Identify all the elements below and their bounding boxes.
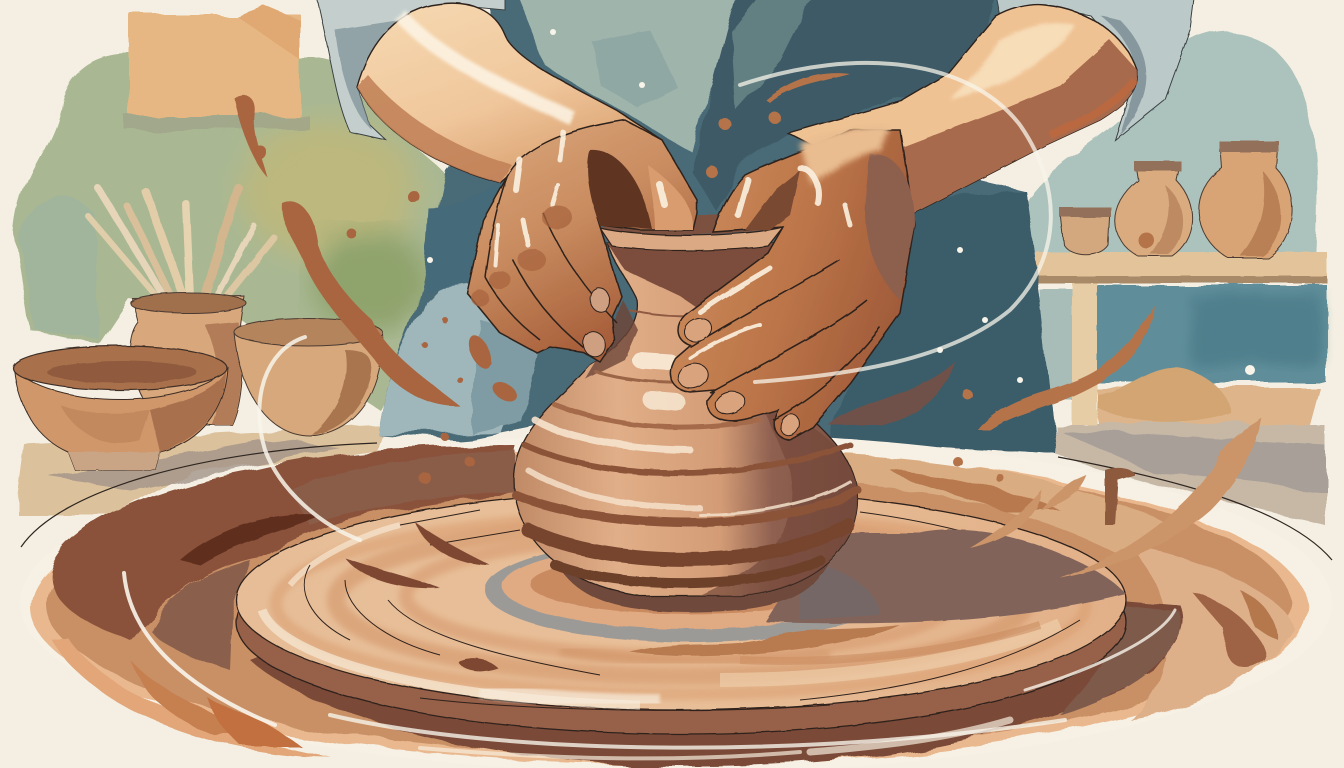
wheel: platter top xyxy=(236,490,1126,710)
wheel: right rim patches xyxy=(840,455,1295,720)
right hand: light tones xyxy=(800,125,890,185)
vase xyxy=(514,215,858,612)
splash: left clay stream xyxy=(234,95,520,484)
clay lump on table xyxy=(1098,368,1230,421)
wheel: dark clay left wall xyxy=(50,445,515,640)
white motion swirls xyxy=(124,63,1175,748)
sleeve: left xyxy=(315,0,505,140)
right hand: wrist shadow xyxy=(865,154,915,300)
sleeve: right xyxy=(995,0,1195,140)
left hand: nails xyxy=(579,284,614,360)
wheel: cream rim strip xyxy=(20,433,1332,768)
splash: right clay stream xyxy=(706,73,1262,578)
wheel: grey recess ring xyxy=(485,538,895,642)
left hand: finger separators xyxy=(485,177,617,347)
wheel: outer line xyxy=(21,443,1332,560)
wheel: grey-brown shadow right xyxy=(1060,606,1181,715)
pot: large xyxy=(1199,142,1293,258)
apron xyxy=(378,0,1057,455)
vase shadow side xyxy=(700,400,858,596)
background wash: blue-grey right wall xyxy=(1020,32,1327,400)
brush pot with brushes xyxy=(88,188,274,425)
vase shadow under left hand xyxy=(585,300,638,380)
arm: left xyxy=(357,3,662,183)
vase foot xyxy=(555,560,830,612)
wheel: dark under platter xyxy=(250,600,1183,766)
side table: left xyxy=(18,425,385,515)
vase rim opening xyxy=(600,215,783,235)
bowl: back xyxy=(234,318,382,436)
shelf with leg xyxy=(1035,252,1327,425)
wheel: platter tones xyxy=(262,510,1100,710)
pot: small xyxy=(1060,208,1110,255)
left hand: knuckles xyxy=(471,205,572,306)
vase body xyxy=(514,243,858,596)
side table: right xyxy=(1055,388,1325,525)
background wash: green wall xyxy=(15,53,450,410)
wheel: stray clay ridges xyxy=(345,522,900,671)
wheel: basin xyxy=(46,452,1290,756)
wheel: outer halo xyxy=(30,449,1306,765)
vase stripes xyxy=(516,310,857,583)
wheel: lower-left clay patches xyxy=(52,560,330,756)
wall panel: orange square xyxy=(125,4,310,130)
arm: right xyxy=(788,5,1137,213)
left hand: palm shadow xyxy=(588,150,652,229)
wheel: white streaks in lower basin xyxy=(420,720,1010,758)
wheel: platter side xyxy=(236,510,1126,734)
hand: left xyxy=(467,120,697,362)
pot: medium xyxy=(1115,162,1192,256)
pot body xyxy=(130,296,244,425)
brushes xyxy=(88,188,274,298)
left hand: highlights xyxy=(495,132,665,265)
hand: right xyxy=(670,125,915,440)
white paint flecks xyxy=(427,29,1255,383)
right hand: finger separators xyxy=(690,260,880,420)
wheel: vase shadow xyxy=(766,530,1126,623)
vase dark neck xyxy=(607,243,773,320)
right hand: nails xyxy=(675,314,803,439)
wheel xyxy=(20,433,1332,768)
vase rim xyxy=(600,227,783,250)
right hand: thumb palm shadow xyxy=(745,170,800,230)
wheel: dark clay upper band xyxy=(290,450,515,525)
pots on shelf xyxy=(1059,141,1293,258)
bowl: front xyxy=(13,346,228,470)
